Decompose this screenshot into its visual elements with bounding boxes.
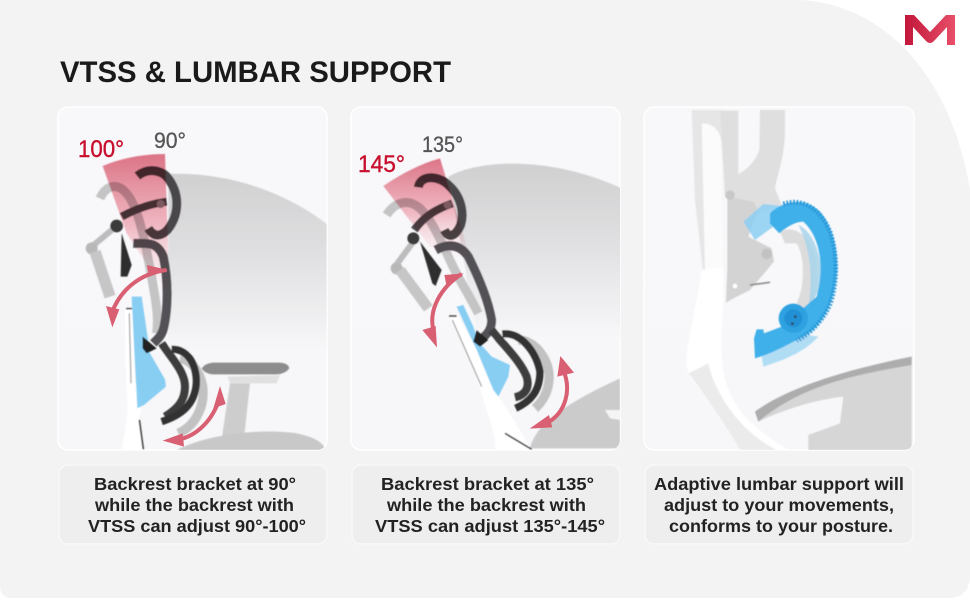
label: 100 degrees: 100°: [78, 136, 124, 163]
caption: backrest at 135 degrees: VTSS can adjust 135°-145°: [375, 516, 605, 536]
caption: backrest at 135 degrees: Backrest bracket at 135°: [381, 474, 594, 494]
label: 145 degrees: 145°: [358, 151, 405, 178]
arrows panel 1: [106, 265, 226, 447]
caption: adaptive lumbar support: conforms to your posture.: [669, 516, 893, 536]
panel: backrest at 135 degrees: [351, 107, 622, 450]
caption: backrest at 135 degrees: [352, 465, 620, 544]
caption: backrest at 90 degrees: while the backrest with: [94, 495, 294, 515]
chair illustration at 90 degrees: [86, 154, 327, 450]
chair illustration at 135 degrees: [383, 158, 622, 450]
lumbar illustration: [687, 110, 912, 450]
title: VTSS & LUMBAR SUPPORT: [60, 56, 451, 89]
caption: adaptive lumbar support: Adaptive lumbar support will: [654, 474, 904, 494]
panel: adaptive lumbar support: [644, 107, 914, 450]
caption: adaptive lumbar support: adjust to your movements,: [664, 495, 894, 515]
label: 90 degrees: 90°: [154, 128, 186, 153]
logo: [905, 15, 955, 45]
arrows panel 2: [422, 273, 574, 429]
caption: backrest at 90 degrees: [59, 465, 327, 544]
caption: adaptive lumbar support: [645, 465, 913, 544]
label: 135 degrees: 135°: [422, 132, 463, 157]
panel: backrest at 90 degrees: [58, 107, 327, 450]
caption: backrest at 90 degrees: VTSS can adjust 90°-100°: [88, 516, 306, 536]
caption: backrest at 135 degrees: while the backrest with: [386, 495, 586, 515]
caption: backrest at 90 degrees: Backrest bracket at 90°: [94, 474, 296, 494]
